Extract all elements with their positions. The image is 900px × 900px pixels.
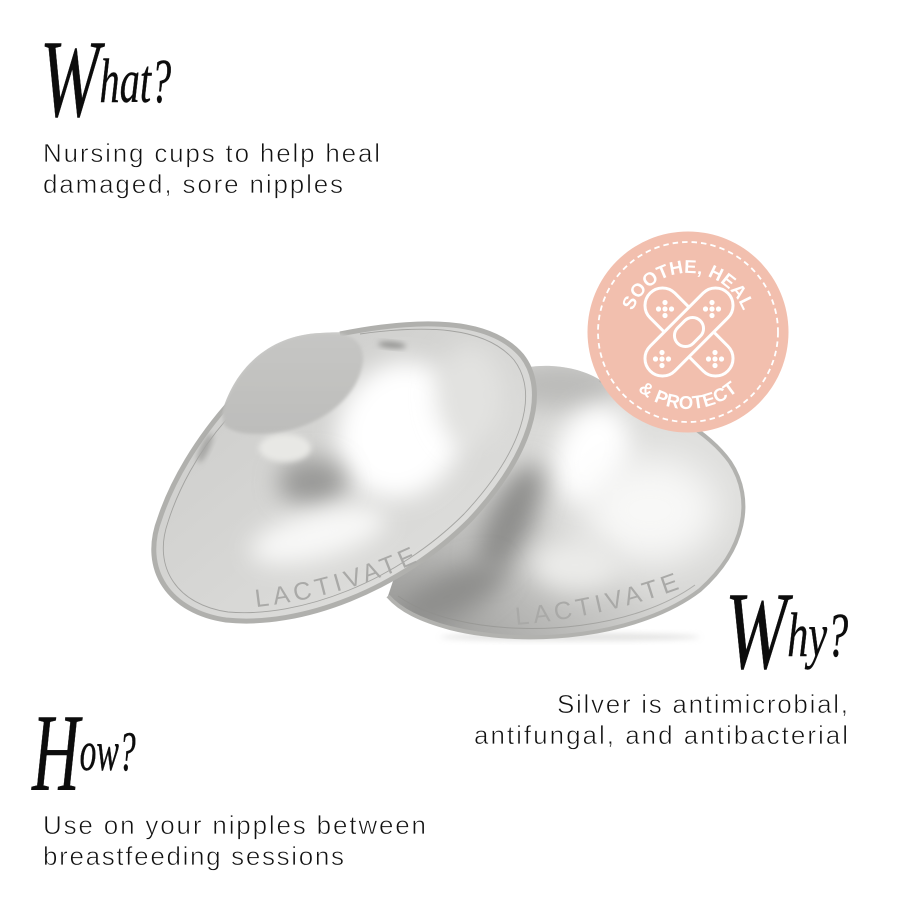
text: why description: antifungal, and antibacterial [474, 720, 848, 750]
logo: LACTIVATE front: LACTIVATE [256, 547, 416, 607]
logo: LACTIVATE rear: LACTIVATE [516, 573, 679, 624]
heading: What?: hat? [100, 47, 171, 116]
section: What [40, 19, 380, 199]
badge: soothe, heal and protect [588, 232, 788, 432]
heading: Why?: W [725, 571, 787, 693]
heading: Why?: hy? [787, 602, 849, 670]
text: how description: breastfeeding sessions [43, 841, 344, 871]
cup: front left [151, 321, 537, 624]
badge text: bottom arc: & PROTECT [640, 380, 735, 410]
text: what description: damaged, sore nipples [43, 169, 343, 199]
heading: How?: ow? [80, 720, 136, 782]
cup: rear right [386, 366, 746, 642]
section: Why [474, 571, 849, 750]
text: how description: Use on your nipples between [43, 810, 426, 840]
icon: crossed bandages [638, 281, 740, 383]
text: what description [43, 138, 380, 199]
section: How [31, 692, 426, 871]
product photo: silver nursing cups [151, 321, 746, 642]
heading: How?: H [32, 692, 80, 814]
text: why description: Silver is antimicrobial, [557, 689, 848, 719]
text: why description [474, 689, 848, 750]
text: what description: Nursing cups to help heal [43, 138, 380, 168]
text: how description [43, 810, 426, 871]
badge text: top arc: SOOTHE, HEAL [622, 260, 752, 310]
heading: What?: W [40, 19, 100, 141]
